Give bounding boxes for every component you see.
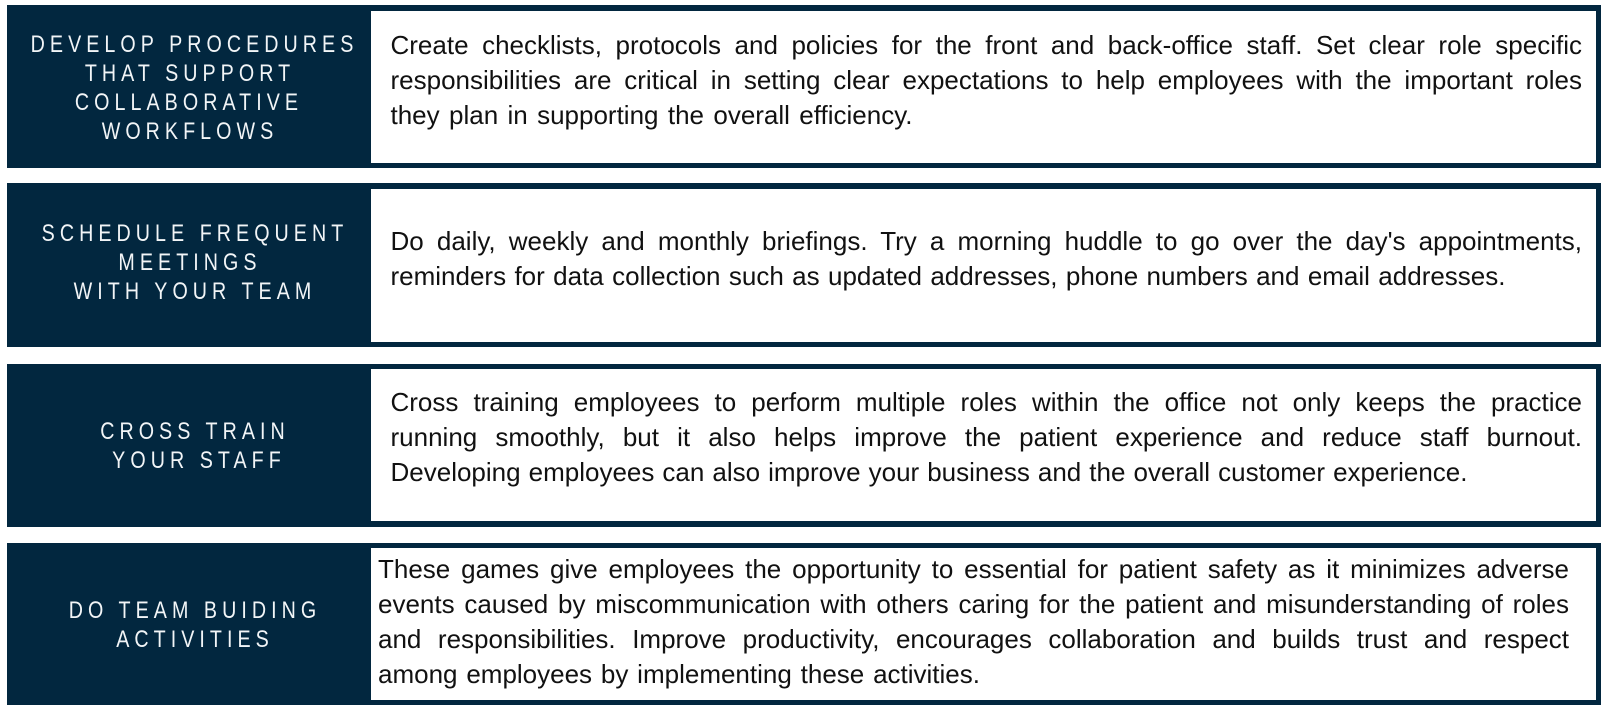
panel: team building	[7, 543, 1601, 705]
panel: cross train	[7, 364, 1601, 527]
text block: team building: events caused by miscommunication with others caring for the patient and misunderstanding of roles	[378, 589, 1569, 619]
text block: cross train: running smoothly, but it also helps improve the patient experience and reduce staff burnout.	[390, 422, 1582, 452]
text block: develop procedures: responsibilities are critical in setting clear expectations to help employees with the important roles	[390, 65, 1582, 95]
text block: team building: These games give employees the opportunity to essential for patient safety as it minimizes adverse	[378, 554, 1569, 584]
text block: develop procedures: Create checklists, protocols and policies for the front and back-office staff. Set clear role specific	[390, 30, 1582, 60]
heading: schedule meetings: MEETINGS	[118, 249, 261, 276]
text block: cross train	[371, 369, 1596, 521]
heading: develop procedures: COLLABORATIVE	[75, 89, 303, 116]
text block: develop procedures: they plan in supporting the overall efficiency.	[390, 100, 912, 130]
heading: develop procedures: DEVELOP PROCEDURES	[31, 31, 358, 58]
text block: schedule meetings	[371, 189, 1596, 342]
heading: schedule meetings	[41, 220, 348, 305]
text block: schedule meetings: reminders for data collection such as updated addresses, phone numbers and email addresses.	[390, 261, 1506, 291]
heading: cross train	[100, 418, 290, 474]
heading: team building: ACTIVITIES	[116, 626, 274, 653]
text block: schedule meetings: Do daily, weekly and monthly briefings. Try a morning huddle to go over the day's appointments,	[390, 226, 1582, 256]
text block: develop procedures	[371, 11, 1596, 163]
heading: develop procedures: WORKFLOWS	[101, 118, 278, 145]
heading: team building	[68, 597, 321, 653]
heading: team building: DO TEAM BUIDING	[68, 597, 321, 624]
text block: team building: among employees by implementing these activities.	[378, 659, 980, 689]
heading: cross train: YOUR STAFF	[112, 447, 285, 474]
heading: develop procedures	[31, 31, 358, 145]
heading: develop procedures: THAT SUPPORT	[84, 60, 295, 87]
text block: cross train: Developing employees can also improve your business and the overall customer experience.	[390, 457, 1468, 487]
heading: schedule meetings: SCHEDULE FREQUENT	[41, 220, 348, 247]
heading: cross train: CROSS TRAIN	[100, 418, 290, 445]
text block: team building: and responsibilities. Improve productivity, encourages collaboration and builds trust and respect	[378, 624, 1569, 654]
text block: cross train: Cross training employees to perform multiple roles within the office not only keeps the practice	[390, 387, 1582, 417]
text block: team building	[371, 548, 1596, 700]
panel: develop procedures	[7, 5, 1601, 168]
panel: schedule meetings	[7, 183, 1601, 347]
heading: schedule meetings: WITH YOUR TEAM	[74, 278, 316, 305]
